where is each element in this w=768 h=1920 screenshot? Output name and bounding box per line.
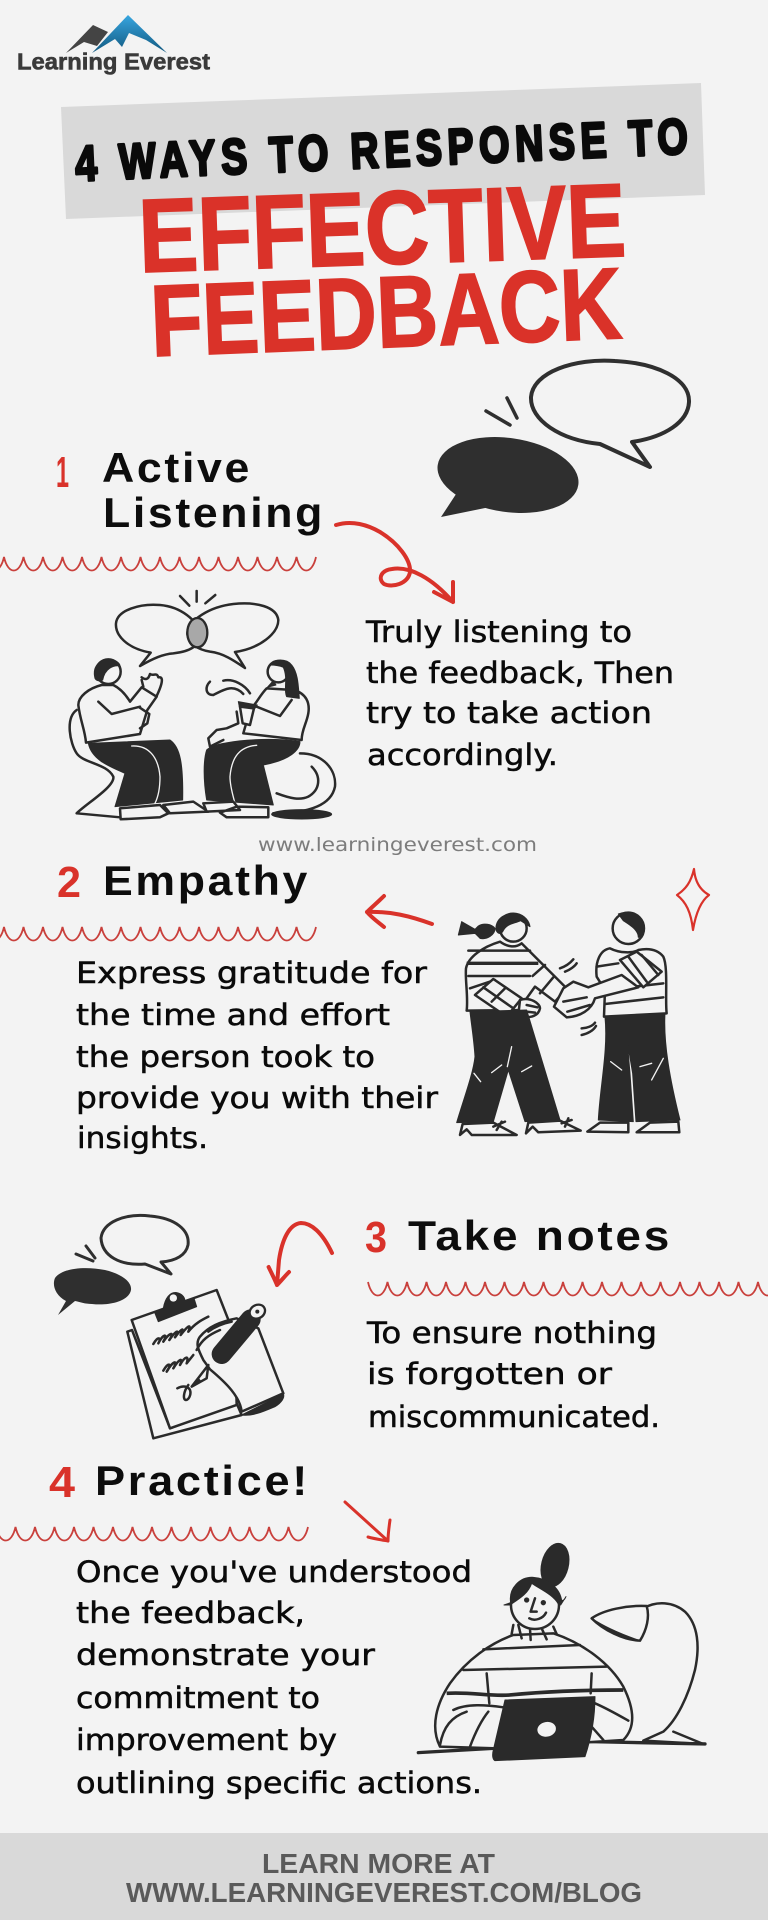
body text: Once you've understood	[76, 1555, 472, 1589]
body text: Express gratitude for	[76, 956, 427, 990]
body text: miscommunicated.	[368, 1400, 660, 1434]
heading: take notes: Take notes	[408, 1212, 672, 1259]
number 3: 3	[365, 1213, 387, 1262]
footer text: WWW.LEARNINGEVEREST.COM/BLOG	[126, 1877, 642, 1908]
footer text	[126, 1848, 642, 1908]
small speech bubbles	[54, 1215, 188, 1315]
title: effective: EFFECTIVE	[137, 163, 627, 295]
body text: commitment to	[76, 1681, 320, 1715]
heading: active listening: Listening	[103, 489, 325, 536]
website watermark: www.learningeverest.com	[258, 834, 537, 856]
section 2: empathy	[0, 857, 709, 1155]
arrow: loop to text	[336, 523, 453, 602]
title: feedback: FEEDBACK	[149, 248, 623, 378]
body text: accordingly.	[367, 738, 558, 772]
body text: insights.	[77, 1121, 208, 1155]
body text: the person took to	[76, 1040, 375, 1074]
heading: active listening	[102, 444, 325, 536]
wavy divider	[0, 557, 316, 570]
illustration: person with laptop and lamp	[418, 1540, 705, 1761]
number 4: 4	[49, 1458, 76, 1507]
body text: improvement by	[76, 1723, 337, 1757]
heading: empathy: Empathy	[103, 857, 310, 904]
illustration: clipboard and hand writing	[127, 1290, 284, 1438]
footer band	[0, 1833, 768, 1920]
section 3: take notes	[54, 1212, 768, 1438]
body text	[365, 615, 674, 772]
section 4: practice	[0, 1457, 705, 1800]
icon: sparkle star	[677, 869, 709, 930]
arrow: curving to clipboard	[269, 1223, 332, 1285]
arrow: down-right	[345, 1502, 390, 1541]
section 1: active listening	[0, 444, 674, 819]
body text: the time and effort	[76, 998, 390, 1032]
icon: speech bubbles	[433, 361, 689, 522]
illustration: handshake	[457, 913, 680, 1135]
heading: practice: Practice!	[95, 1457, 310, 1504]
title line: 4 ways to response to: 4 WAYS TO RESPONSE TO	[74, 108, 689, 192]
title banner background	[61, 83, 705, 219]
body text: outlining specific actions.	[76, 1766, 482, 1800]
body text: try to take action	[366, 696, 652, 730]
number 2: 2	[57, 858, 81, 907]
body text: the feedback, Then	[366, 656, 674, 690]
body text	[76, 1555, 482, 1800]
wavy divider	[0, 1527, 308, 1540]
body text	[366, 1316, 660, 1434]
wavy divider	[368, 1282, 768, 1296]
footer text: LEARN MORE AT	[262, 1848, 495, 1879]
number 1: 1	[56, 448, 69, 497]
body text	[76, 956, 438, 1155]
body text: To ensure nothing	[366, 1316, 657, 1350]
body text: the feedback,	[76, 1596, 305, 1630]
logo: Learning Everest	[17, 15, 210, 74]
logo: Learning Everest: Learning Everest	[17, 48, 210, 74]
illustration: two people talking	[70, 591, 335, 819]
body text: demonstrate your	[76, 1638, 375, 1672]
heading: active listening: Active	[102, 444, 252, 491]
arrow: left	[367, 896, 432, 927]
body text: Truly listening to	[365, 615, 632, 649]
body text: provide you with their	[76, 1081, 438, 1115]
wavy divider	[0, 927, 316, 940]
body text: is forgotten or	[367, 1357, 612, 1391]
